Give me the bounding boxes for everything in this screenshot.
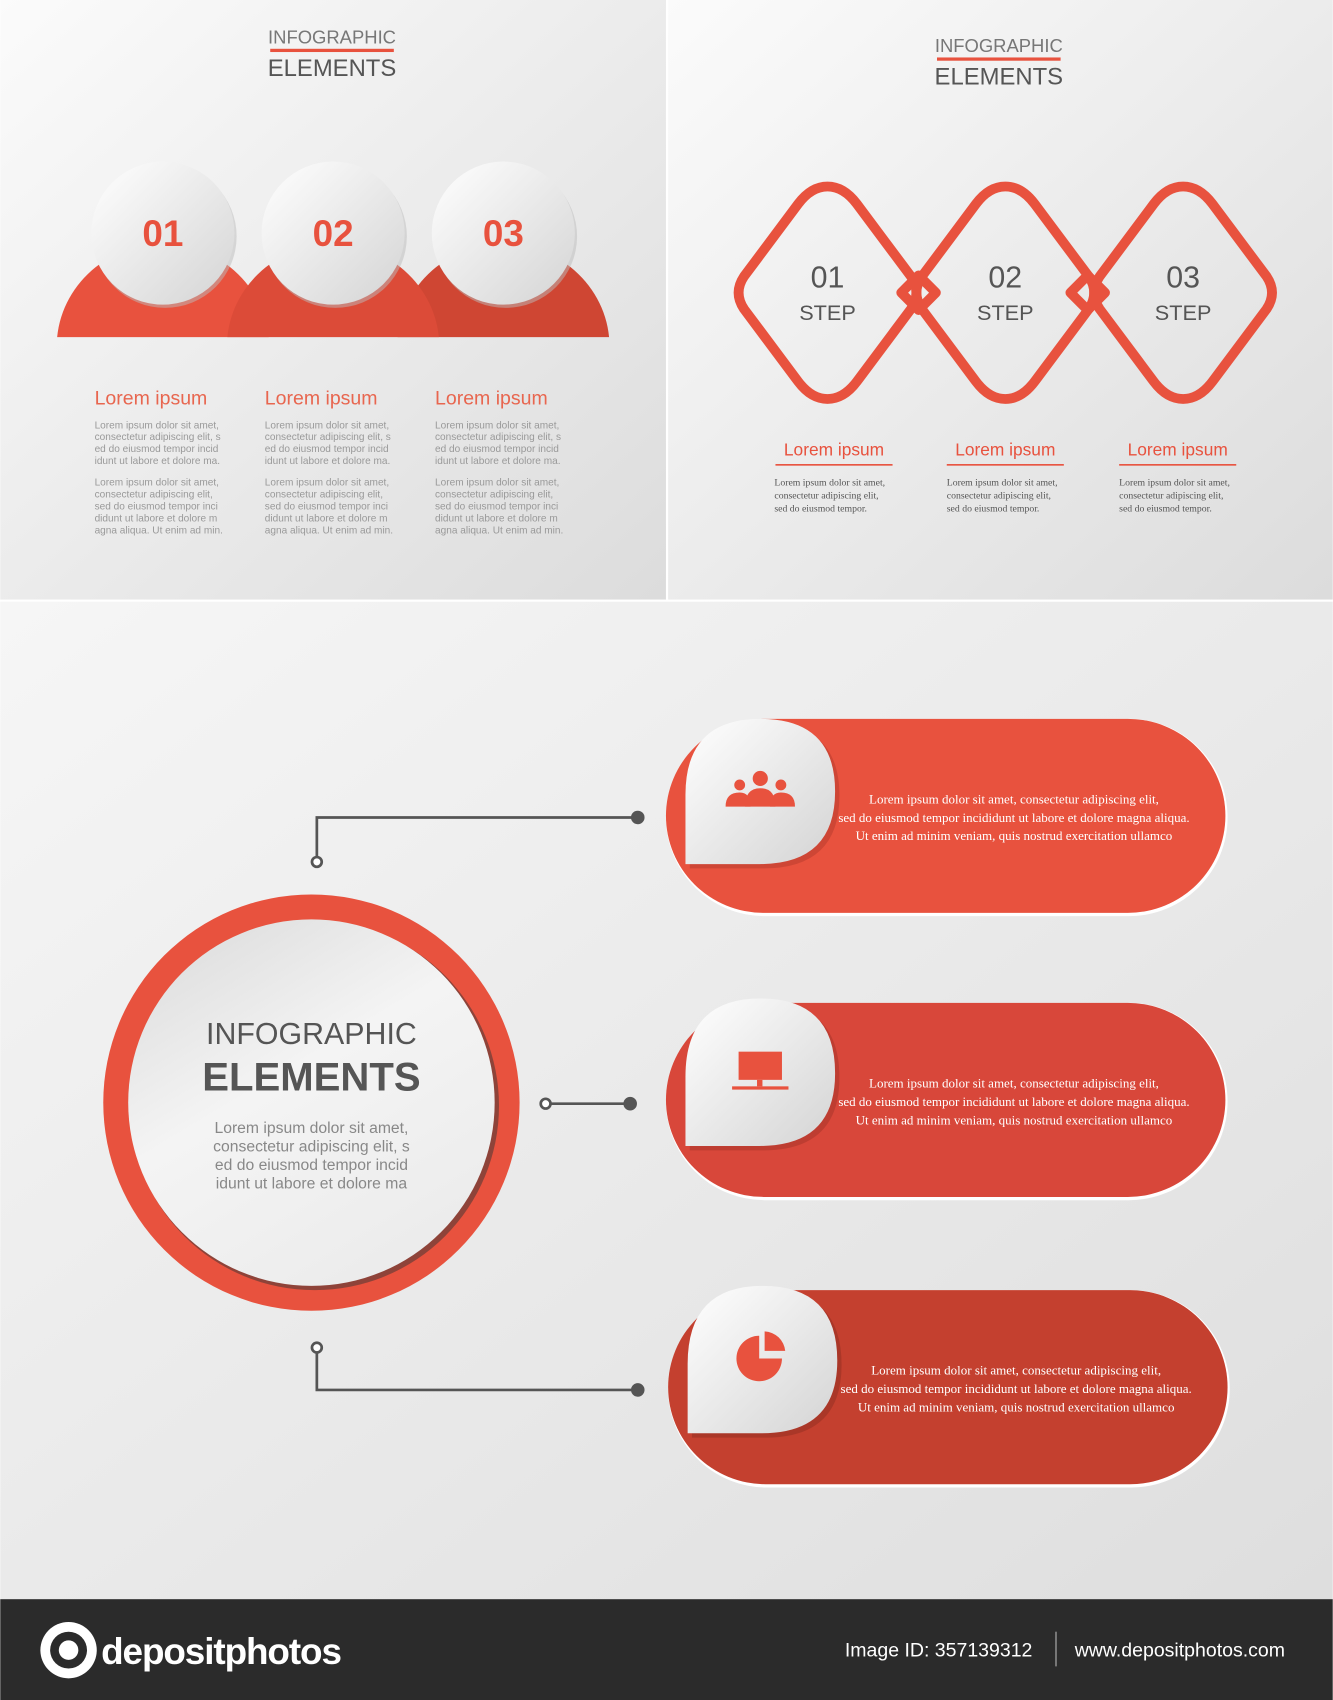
- chart: step diamonds: [739, 186, 1272, 399]
- chart: red humps with numbered circles: [57, 162, 610, 338]
- text blocks: top-left columns: consectetur adipiscing elit, s: [265, 432, 391, 443]
- chart: step diamonds: STEP: [799, 300, 856, 325]
- big circle: infographic elements: idunt ut labore et dolore ma: [216, 1175, 407, 1192]
- text blocks: top-left columns: idunt ut labore et dolore ma.: [265, 456, 390, 467]
- text blocks: top-left columns: [95, 387, 563, 536]
- card 2: computer: [666, 999, 1228, 1200]
- text blocks: top-left columns: Lorem ipsum: [435, 387, 548, 409]
- text blocks: top-left columns: agna aliqua. Ut enim ad min.: [95, 525, 223, 536]
- text blocks: top-left columns: idunt ut labore et dolore ma.: [95, 456, 220, 467]
- text blocks: top-right columns: Lorem ipsum dolor sit amet,: [1119, 478, 1230, 489]
- text blocks: top-right columns: Lorem ipsum: [955, 439, 1055, 459]
- text blocks: top-right columns: sed do eiusmod tempor.: [1119, 504, 1212, 515]
- panel: bottom background: [0, 602, 1333, 1599]
- card 1: team: Lorem ipsum dolor sit amet, consectetur adipiscing elit,: [869, 791, 1159, 806]
- footer bar: Image ID: 357139312: [845, 1640, 1032, 1662]
- card 1: team: Ut enim ad minim veniam, quis nostrud exercitation ullamco: [856, 828, 1172, 843]
- big circle: infographic elements: consectetur adipiscing elit, s: [213, 1138, 410, 1155]
- text blocks: top-left columns: Lorem ipsum: [265, 387, 378, 409]
- card 2: computer: Lorem ipsum dolor sit amet, consectetur adipiscing elit,: [869, 1075, 1159, 1090]
- footer bar: www.depositphotos.com: [1074, 1640, 1285, 1662]
- chart: step diamonds: 02: [988, 261, 1022, 294]
- chart: step diamonds: STEP: [1155, 300, 1211, 325]
- text blocks: top-left columns: Lorem ipsum dolor sit amet,: [265, 420, 389, 431]
- text blocks: top-left columns: agna aliqua. Ut enim ad min.: [435, 525, 563, 536]
- title: top-left: INFOGRAPHIC: [268, 26, 396, 47]
- big circle: infographic elements: ed do eiusmod tempor incid: [215, 1157, 408, 1174]
- text blocks: top-left columns: consectetur adipiscing elit,: [95, 490, 213, 501]
- text blocks: top-left columns: agna aliqua. Ut enim ad min.: [265, 525, 393, 536]
- text blocks: top-left columns: Lorem ipsum dolor sit amet,: [95, 478, 219, 489]
- text blocks: top-right columns: Lorem ipsum dolor sit amet,: [947, 478, 1058, 489]
- big circle: infographic elements: Lorem ipsum dolor sit amet,: [214, 1120, 408, 1137]
- footer bar: [0, 1599, 1333, 1700]
- icon: logo camera: [40, 1622, 97, 1678]
- chart: red humps with numbered circles: 01: [142, 213, 183, 254]
- card 2: computer: sed do eiusmod tempor incididunt ut labore et dolore magna aliqua.: [838, 1094, 1190, 1109]
- text blocks: top-left columns: Lorem ipsum: [95, 387, 207, 409]
- card 3: pie chart: Ut enim ad minim veniam, quis nostrud exercitation ullamco: [858, 1400, 1174, 1415]
- title: top-right: INFOGRAPHIC: [935, 35, 1063, 56]
- panel: top-right background: [668, 0, 1333, 600]
- footer bar: depositphotos: [101, 1631, 341, 1672]
- icon: monitor: [732, 1052, 788, 1090]
- text blocks: top-right columns: consectetur adipiscing elit,: [947, 491, 1051, 502]
- icon: pie chart: [736, 1331, 785, 1381]
- icon: people: [726, 771, 795, 807]
- text blocks: top-right columns: sed do eiusmod tempor.: [947, 504, 1039, 515]
- text blocks: top-left columns: consectetur adipiscing elit, s: [435, 432, 561, 443]
- big circle: infographic elements: INFOGRAPHIC: [206, 1018, 417, 1051]
- card 1: team: sed do eiusmod tempor incididunt ut labore et dolore magna aliqua.: [838, 810, 1190, 825]
- text blocks: top-left columns: ed do eiusmod tempor incid: [95, 444, 218, 455]
- text blocks: top-left columns: Lorem ipsum dolor sit amet,: [95, 420, 219, 431]
- title: top-right: ELEMENTS: [935, 64, 1063, 91]
- chart: step diamonds: STEP: [977, 300, 1034, 325]
- title: top-right: [935, 35, 1063, 91]
- text blocks: top-left columns: sed do eiusmod tempor inci: [265, 502, 388, 513]
- text blocks: top-left columns: didunt ut labore et dolore m: [95, 513, 217, 524]
- card 3: pie chart: sed do eiusmod tempor incididunt ut labore et dolore magna aliqua.: [841, 1381, 1192, 1396]
- title: top-left: [268, 26, 396, 82]
- card 3: pie chart: [668, 1286, 1230, 1488]
- text blocks: top-left columns: ed do eiusmod tempor incid: [265, 444, 389, 455]
- text blocks: top-left columns: consectetur adipiscing elit, s: [95, 432, 221, 443]
- text blocks: top-left columns: sed do eiusmod tempor inci: [435, 502, 558, 513]
- text blocks: top-right columns: Lorem ipsum dolor sit amet,: [774, 478, 885, 489]
- card 2: computer: Ut enim ad minim veniam, quis nostrud exercitation ullamco: [856, 1112, 1172, 1127]
- text blocks: top-left columns: ed do eiusmod tempor incid: [435, 444, 559, 455]
- text blocks: top-left columns: consectetur adipiscing elit,: [435, 490, 553, 501]
- text blocks: top-right columns: consectetur adipiscing elit,: [1119, 491, 1223, 502]
- text blocks: top-right columns: Lorem ipsum: [784, 439, 884, 459]
- text blocks: top-left columns: Lorem ipsum dolor sit amet,: [265, 478, 389, 489]
- text blocks: top-left columns: Lorem ipsum dolor sit amet,: [435, 478, 559, 489]
- text blocks: top-left columns: consectetur adipiscing elit,: [265, 490, 383, 501]
- text blocks: top-left columns: sed do eiusmod tempor inci: [95, 502, 218, 513]
- title: top-left: ELEMENTS: [268, 55, 396, 82]
- chart: red humps with numbered circles: 02: [313, 213, 354, 254]
- chart: red humps with numbered circles: 03: [483, 213, 524, 254]
- text blocks: top-left columns: didunt ut labore et dolore m: [435, 513, 558, 524]
- card 3: pie chart: Lorem ipsum dolor sit amet, consectetur adipiscing elit,: [871, 1363, 1161, 1378]
- chart: step diamonds: 01: [811, 261, 844, 294]
- text blocks: top-right columns: [774, 439, 1236, 515]
- text blocks: top-left columns: didunt ut labore et dolore m: [265, 513, 388, 524]
- text blocks: top-right columns: sed do eiusmod tempor.: [774, 504, 867, 515]
- text blocks: top-left columns: idunt ut labore et dolore ma.: [435, 456, 561, 467]
- text blocks: top-right columns: Lorem ipsum: [1128, 439, 1228, 459]
- connector lines: [312, 812, 643, 1395]
- big circle: infographic elements: ELEMENTS: [202, 1056, 421, 1100]
- big circle: infographic elements: [103, 894, 520, 1311]
- card 1: team: [666, 719, 1228, 916]
- chart: step diamonds: 03: [1166, 261, 1200, 294]
- text blocks: top-left columns: Lorem ipsum dolor sit amet,: [435, 420, 559, 431]
- panel: top-left background: [0, 0, 666, 600]
- text blocks: top-right columns: consectetur adipiscing elit,: [774, 491, 879, 502]
